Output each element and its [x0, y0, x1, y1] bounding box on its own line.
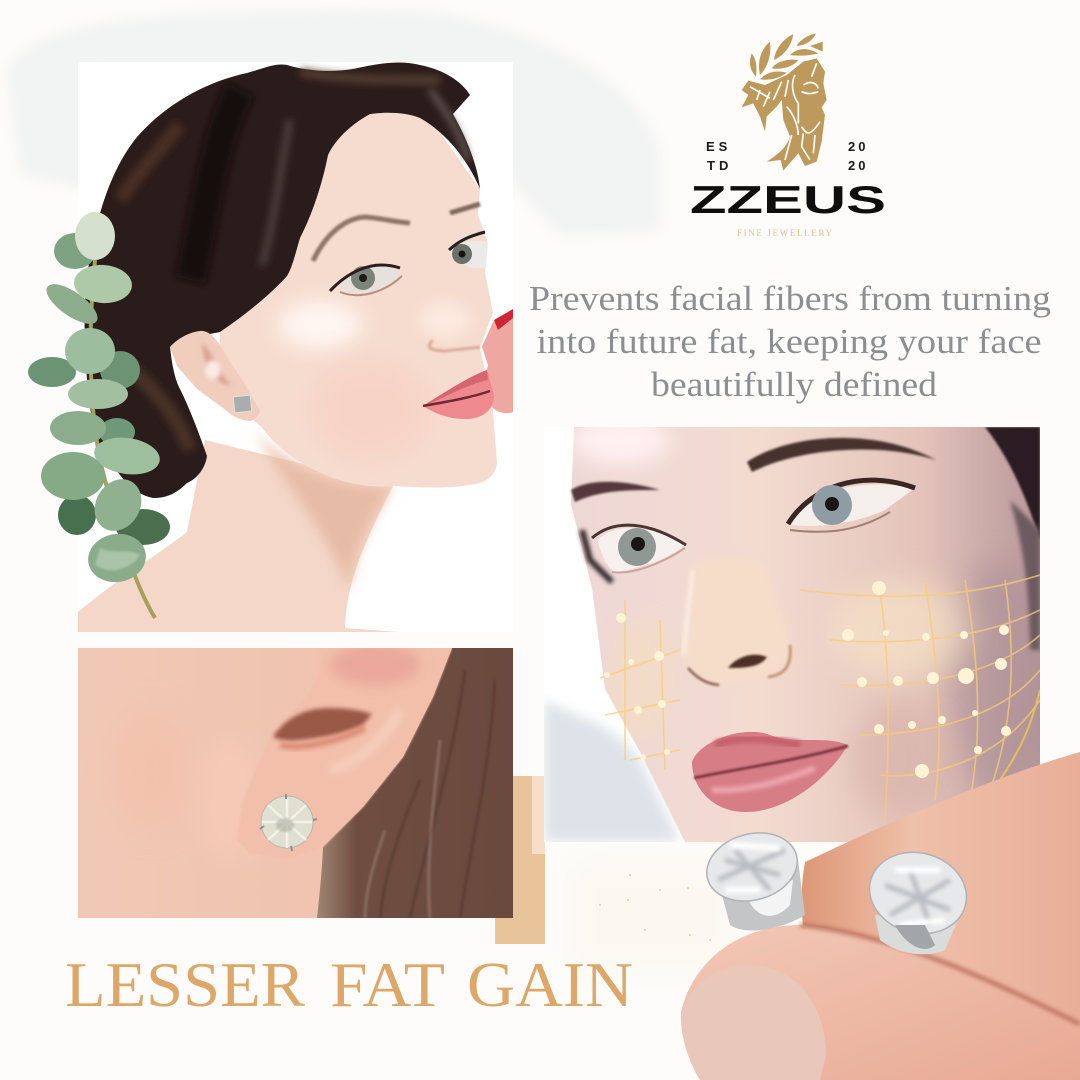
right eye: [788, 484, 915, 526]
sand speckles: [599, 874, 711, 941]
neck and shoulder: [78, 440, 400, 632]
right earring: [860, 842, 976, 954]
brows: [313, 217, 410, 261]
text block: description: into future fat, keeping your face: [536, 322, 1042, 361]
stud earring: [261, 796, 313, 848]
year text: 20: [848, 139, 868, 154]
warm sand glow bottom: [570, 860, 740, 970]
panel: woman portrait photo: [78, 62, 513, 632]
ear fold: [273, 708, 372, 741]
panel: fingers holding earrings photo: [681, 752, 1080, 1080]
ear: [237, 648, 452, 858]
brand name: ZZEUS: [690, 179, 886, 222]
ear with stud: [170, 331, 260, 421]
heading: FAT: [330, 950, 445, 1020]
logo: ZZEUS: TD: [707, 158, 732, 173]
grey smudge background: [6, 9, 660, 236]
lips: [692, 732, 848, 812]
lower finger: [681, 925, 1080, 1080]
face: [220, 105, 497, 488]
panel: ear close-up photo: [78, 645, 513, 918]
cheek highlight: [278, 301, 362, 349]
left brow: [571, 482, 660, 502]
accent orange block: [495, 776, 545, 944]
glow dots: [604, 581, 1011, 778]
warm glow: [830, 580, 970, 680]
icon: gold Zeus head: [742, 33, 827, 171]
hair: [985, 427, 1040, 540]
tagline: FINE JEWELLERY: [737, 228, 832, 238]
right brow: [747, 438, 936, 472]
hair on the right: [317, 648, 513, 918]
nose: [688, 564, 727, 678]
near eye: [338, 266, 400, 292]
logo: ZZEUS: 20: [848, 158, 868, 173]
stem: [91, 260, 155, 618]
text block: description: Prevents facial fibers from turning: [529, 279, 1051, 318]
est text: ES: [706, 139, 731, 154]
panel: face with glowing grid photo: [544, 415, 1050, 842]
glow grid: [600, 575, 1040, 820]
left eye: [598, 528, 685, 572]
heading: GAIN: [467, 950, 633, 1020]
top pale forehead highlight: [574, 427, 672, 470]
nose: [429, 340, 480, 351]
fingernail: [681, 965, 826, 1080]
blue-grey backdrop: [544, 700, 680, 842]
panel: eucalyptus sprig: [28, 212, 170, 618]
far eye: [450, 241, 488, 268]
logo: ZZEUS: [690, 33, 886, 238]
text block: description: [529, 279, 1051, 404]
hair shading: [120, 72, 468, 450]
hair back: [85, 62, 480, 498]
heading: [65, 950, 633, 1020]
left earring: [699, 823, 805, 930]
face shape: [571, 427, 1040, 842]
upper finger: [802, 752, 1080, 1040]
lips: [423, 370, 494, 419]
cheek shadow: [942, 564, 1036, 788]
heading: LESSER: [65, 950, 305, 1020]
hand fingers: [482, 310, 513, 413]
text block: description: beautifully defined: [651, 365, 938, 404]
